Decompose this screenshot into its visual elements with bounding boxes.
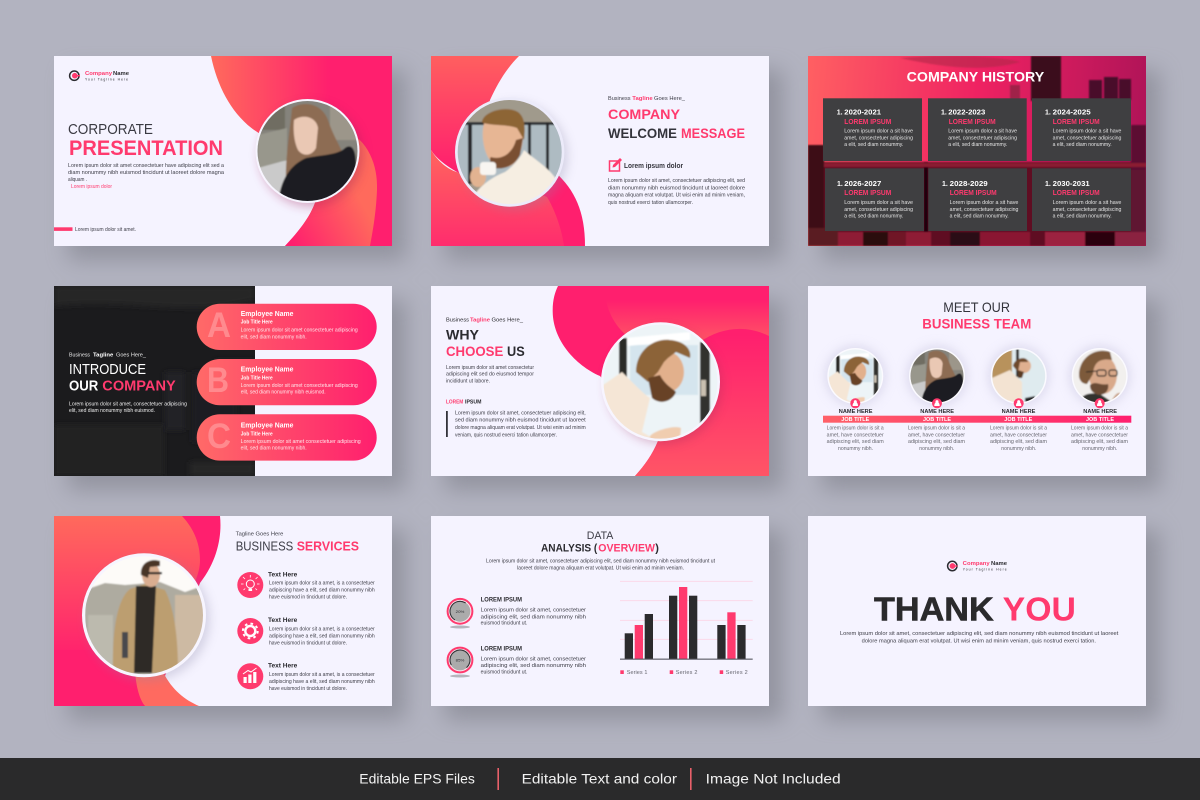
heading: MESSAGE (681, 125, 745, 141)
card: 2028-2029 (928, 168, 1027, 231)
heading: CHOOSE (446, 343, 503, 359)
gauge 85%: 85% (456, 658, 465, 662)
employee pill C: Employee Name (241, 420, 293, 429)
intro text: Lorem ipsum dolor sit amet consectetur (446, 365, 534, 371)
team member 4: NAME HERE (1083, 409, 1117, 415)
chart legend: Series 2 (676, 670, 697, 676)
dark pink wave (54, 516, 220, 706)
card: 2026-2027 (825, 168, 924, 231)
logo: Name (991, 561, 1007, 567)
heading (874, 592, 1076, 629)
card: 2022-2023: 1. (941, 110, 947, 117)
heading: ANALYSIS ( (541, 542, 598, 554)
coral wave shape (285, 130, 377, 246)
service text 2: Text Here (268, 617, 298, 624)
card: 2030-2031: a elit, sed diam nonummy. (1053, 214, 1112, 220)
subsection: veniam, quis nostrud exerci tation ullamcorper. (455, 433, 557, 439)
gauge 20% (446, 598, 474, 628)
subsection: sed diam nonummy nibh euismod tincidunt ut laoreet (455, 417, 586, 423)
employee pill C: C (207, 417, 231, 456)
service text 3: adipiscing have a elit, sed diam nonummy nibh (269, 679, 375, 685)
team member 1: Lorem ipsum dolor is sit a (827, 425, 884, 431)
slide shadows (68, 70, 1160, 720)
card: 2024-2025: amet, consectetuer adipiscing (1053, 136, 1122, 142)
icon: light bulb (237, 572, 263, 598)
employee pill A: elit, sed diam nonummy nibh. (241, 334, 307, 340)
card: 2026-2027: Lorem ipsum dolor a sit have (844, 200, 913, 206)
card: 2022-2023: Lorem ipsum dolor a sit have (948, 129, 1017, 135)
left text block: Business (69, 353, 90, 359)
left text block: INTRODUCE (69, 362, 146, 378)
heading: OVERVIEW (598, 542, 656, 554)
city photo background (808, 56, 1146, 246)
employee pill A: Employee Name (241, 309, 293, 318)
dark city photo (54, 286, 255, 476)
panel: company welcome message slide (431, 56, 769, 246)
logo: Company (963, 561, 991, 567)
chart legend: Series 2 (726, 670, 748, 676)
team member 3: NAME HERE (1002, 409, 1036, 415)
card: 2028-2029: 1. (942, 181, 948, 188)
intro text (446, 365, 534, 384)
gauge text 1 (481, 597, 586, 627)
footer text: EPS files: Editable EPS Files (359, 770, 475, 786)
card: 2024-2025: a elit, sed diam nonummy. (1053, 142, 1112, 148)
heading (541, 530, 659, 554)
left text block: Tagline (93, 353, 113, 359)
gauge 20%: 20% (456, 610, 465, 614)
gauge 85% (446, 646, 474, 678)
team member 3: nonummy nibh. (1001, 446, 1036, 452)
body text: dolore magna aliquam erat volutpat. Ut wisi enim ad minim veniam, quis nostrud exerci tation. (862, 638, 1096, 644)
employee pill A: Job Title Here (241, 320, 273, 326)
photo: man in coat (82, 553, 206, 677)
team member 3 (988, 345, 1050, 452)
logo: Company (85, 71, 113, 77)
service text 1: adipiscing have a elit, sed diam nonummy nibh (269, 587, 375, 593)
lighter inner blob (606, 300, 769, 345)
team member 3: amet, have consectetuer (990, 432, 1047, 438)
service text 1: have euismod in tincidunt ut dolore. (269, 595, 347, 601)
body text: Lorem ipsum dolor sit amet, consectetuer adipiscing elit, sed diam nonummy nibh euismod tincidunt ut laoreet (840, 631, 1119, 637)
heading: BUSINESS (236, 539, 294, 554)
card: 2030-2031 (1032, 168, 1131, 231)
card: 2020-2021: a elit, sed diam nonummy. (844, 142, 903, 148)
team member 1: nonummy nibh. (838, 446, 873, 452)
gauge text 1: euismod tincidunt ut. (481, 621, 527, 627)
panel: data analysis slide (431, 516, 769, 706)
service text 3 (268, 663, 375, 692)
subheading and body: Lorem ipsum dolor sit amet, consectetuer adipiscing elit, sed (608, 178, 745, 184)
card: 2030-2031: 2030-2031 (1053, 181, 1090, 188)
intro text: adipiscing elit sed do eiusmod tempor (446, 372, 534, 378)
tagline: Goes Here_ (492, 318, 524, 324)
panel: why choose us slide (431, 286, 769, 476)
team member 3: JOB TITLE (1004, 417, 1033, 423)
service text 3: Text Here (268, 663, 298, 670)
icon: edit note (610, 158, 622, 171)
card: 2024-2025: Lorem ipsum dolor a sit have (1053, 129, 1122, 135)
heading (446, 326, 525, 359)
title: COMPANY HISTORY (907, 69, 1045, 85)
tagline: Tagline (632, 96, 653, 102)
employee pill C: Job Title Here (241, 431, 273, 437)
heading: SERVICES (297, 539, 359, 554)
heading: CORPORATE (68, 121, 153, 138)
panel: introduce our company slide (54, 286, 392, 476)
heading: ) (655, 542, 659, 554)
service text 1 (268, 571, 375, 601)
heading (608, 106, 745, 141)
subsection: LOREM (446, 399, 464, 405)
employee pill A (197, 304, 377, 350)
photo: woman (256, 99, 360, 203)
icon: growth chart (237, 663, 263, 689)
subsection: dolore magna aliquam erat volutpat. Ut wisi enim ad minim (455, 425, 586, 431)
intro text: incididunt ut labore. (446, 378, 490, 384)
team member 2: JOB TITLE (923, 417, 952, 423)
heading: WHY (446, 326, 480, 342)
left text block: Lorem ipsum dolor sit amet, consectetuer adipiscing (69, 401, 187, 407)
footer accent and note: Lorem ipsum dolor sit amet. (75, 227, 136, 233)
card: 2028-2029: Lorem ipsum dolor a sit have (950, 200, 1019, 206)
card: 2026-2027: 1. (837, 181, 843, 188)
team member 4: Lorem ipsum dolor is sit a (1071, 425, 1128, 431)
team member 4: adipiscing elit, sed diam (1071, 439, 1128, 445)
card: 2030-2031: amet, consectetuer adipiscing (1053, 207, 1122, 213)
footer text: editable text: Editable Text and color (522, 770, 677, 786)
team member 2: adipiscing elit, sed diam (908, 439, 965, 445)
tagline: Tagline (470, 318, 490, 324)
gauge text 2: adipiscing elit, sed diam nonummy nibh (481, 663, 586, 669)
panel: thank you slide (808, 516, 1146, 706)
heading (922, 299, 1031, 331)
heading (236, 531, 359, 554)
card: 2028-2029: LOREM IPSUM (950, 190, 997, 197)
left text block (69, 353, 187, 414)
right overlay blob (635, 329, 769, 476)
employee pill B: elit, sed diam nonummy nibh euismod. (241, 390, 326, 396)
subsection: IPSUM (465, 399, 482, 405)
left text block: OUR (69, 379, 99, 395)
gauge text 1: LOREM IPSUM (481, 597, 522, 604)
pink wave shape (211, 56, 392, 246)
body text: diam nonummy nibh euismod tincidunt ut laoreet dolore magna (68, 170, 224, 176)
card: 2022-2023 (928, 98, 1027, 161)
body text (68, 163, 224, 190)
heading: WELCOME (608, 125, 677, 141)
card: 2020-2021: Lorem ipsum dolor a sit have (844, 129, 913, 135)
card: 2028-2029: amet, consectetuer adipiscing (950, 207, 1019, 213)
body text: aliquam . (68, 177, 87, 183)
panel: business services slide (54, 516, 392, 706)
team member 1 (824, 345, 886, 452)
employee pill B: Job Title Here (241, 375, 273, 381)
service text 2 (268, 617, 375, 646)
subsection: Lorem ipsum dolor sit amet, consectetuer adipiscing elit, (455, 410, 586, 416)
card: 2030-2031: Lorem ipsum dolor a sit have (1053, 200, 1122, 206)
gauge text 2 (481, 645, 586, 676)
left text block: elit, sed diam nonummy nibh euismod. (69, 408, 155, 414)
card: 2024-2025: 1. (1045, 110, 1051, 117)
tagline (446, 318, 524, 324)
gradient title bar (823, 416, 1131, 423)
pink blob (553, 286, 769, 476)
card: 2020-2021: amet, consectetuer adipiscing (844, 136, 913, 142)
gauge text 2: Lorem ipsum dolor sit amet, consectetuer (481, 656, 586, 662)
photo: man with coffee (455, 97, 565, 210)
panel: corporate presentation slide (54, 56, 392, 246)
top left wave (431, 56, 519, 180)
employee pill B: B (207, 361, 229, 400)
service text 1: Text Here (268, 571, 298, 578)
card: 2026-2027: a elit, sed diam nonummy. (844, 214, 903, 220)
coral gradient wave (54, 516, 200, 706)
card: 2024-2025: LOREM IPSUM (1053, 119, 1100, 126)
team member 1: JOB TITLE (841, 417, 870, 423)
tagline: Business (446, 318, 469, 324)
logo: Your Tagline Here (963, 568, 1007, 572)
service text 3: Lorem ipsum dolor sit a amet, is a consectetuer (269, 672, 375, 678)
logo: Your Tagline Here (85, 77, 128, 81)
tagline: Goes Here_ (654, 96, 686, 102)
team member 2: nonummy nibh. (919, 446, 954, 452)
team member 4: JOB TITLE (1086, 417, 1115, 423)
heading: BUSINESS TEAM (922, 315, 1031, 331)
employee pill C: Lorem ipsum dolor sit amet consectetuer adipiscing (241, 439, 361, 445)
chart legend (620, 670, 748, 676)
intro text: Lorem ipsum dolor sit amet, consectetuer adipiscing elit, sed diam nonummy nibh euismod tincidunt ut (486, 559, 716, 565)
subheading and body (608, 163, 745, 206)
subheading and body: diam nonummy nibh euismod tincidunt ut laoreet dolore (608, 185, 745, 191)
subsection (446, 399, 586, 439)
employee pill B (197, 359, 377, 405)
body text: Lorem ipsum dolor sit amet consectetuer have adipiscing elit sed a (68, 163, 224, 169)
service text 2: Lorem ipsum dolor sit a amet, is a consectetuer (269, 626, 375, 632)
logo (948, 561, 1007, 572)
employee pill C: elit, sed diam nonummy nibh. (241, 446, 307, 452)
gauge text 2: LOREM IPSUM (481, 645, 522, 652)
chart legend: Series 1 (627, 670, 647, 676)
employee pill C (197, 414, 377, 461)
heading: US (507, 343, 525, 359)
team member 2: amet, have consectetuer (908, 432, 965, 438)
team member 2: NAME HERE (920, 409, 954, 415)
employee pill A: Lorem ipsum dolor sit amet consectetuer adipiscing (241, 328, 358, 334)
team member 4: nonummy nibh. (1082, 446, 1117, 452)
footer bar (0, 758, 1200, 800)
logo: Name (113, 71, 129, 77)
bar chart (620, 581, 753, 676)
subheading and body: quis nostrud exerci tation ullamcorper. (608, 200, 693, 206)
heading: MEET OUR (943, 299, 1010, 315)
card: 2030-2031: LOREM IPSUM (1053, 190, 1100, 197)
team member 3: Lorem ipsum dolor is sit a (990, 425, 1047, 431)
team member 4: amet, have consectetuer (1071, 432, 1128, 438)
panel: meet our business team slide (808, 286, 1146, 476)
heading: PRESENTATION (69, 137, 223, 160)
body text (840, 631, 1119, 644)
left text block: COMPANY (102, 379, 176, 395)
panel: company history slide (808, 56, 1146, 246)
card: 2030-2031: 1. (1045, 181, 1051, 188)
logo (70, 71, 129, 81)
card: 2026-2027: amet, consectetuer adipiscing (844, 207, 913, 213)
card: 2022-2023: 2022-2023 (948, 110, 985, 117)
body text: Lorem ipsum dolor (71, 184, 112, 190)
left text block: Goes Here_ (116, 353, 147, 359)
service text 2: have euismod in tincidunt ut dolore. (269, 640, 347, 646)
intro text: laoreet dolore magna aliquam erat volutpat. Ut wisi enim ad minim veniam. (517, 565, 684, 571)
intro text (486, 559, 716, 571)
card: 2026-2027: 2026-2027 (844, 181, 881, 188)
heading: Tagline Goes Here (236, 531, 283, 537)
subheading and body: magna aliquam erat volutpat. Ut wisi enim ad minim veniam, (608, 193, 745, 199)
heading: DATA (587, 530, 614, 542)
tagline: Business (608, 96, 631, 102)
employee pill B: Employee Name (241, 365, 293, 374)
photo: man in profile (600, 322, 722, 442)
team member 1: adipiscing elit, sed diam (827, 439, 884, 445)
card: 2022-2023: LOREM IPSUM (949, 119, 996, 126)
heading: COMPANY (608, 106, 681, 122)
team member 2: Lorem ipsum dolor is sit a (908, 425, 965, 431)
bottom wave (431, 150, 564, 246)
card: 2020-2021: 2020-2021 (844, 110, 881, 117)
card: 2020-2021: 1. (837, 110, 843, 117)
card: 2026-2027: LOREM IPSUM (844, 190, 891, 197)
dark pink wave (530, 172, 585, 246)
heading: YOU (1003, 592, 1076, 629)
card: 2020-2021: LOREM IPSUM (844, 119, 891, 126)
card: 2020-2021 (823, 98, 922, 161)
tagline (608, 96, 686, 102)
team member 4 (1069, 345, 1131, 452)
heading: THANK (874, 592, 994, 629)
service text 3: have euismod in tincidunt ut dolore. (269, 686, 347, 692)
service text 2: adipiscing have a elit, sed diam nonummy nibh (269, 633, 375, 639)
employee pill B: Lorem ipsum dolor sit amet consectetuer adipiscing (241, 383, 358, 389)
gauge text 1: Lorem ipsum dolor sit amet, consectetuer (481, 608, 586, 614)
service text 1: Lorem ipsum dolor sit a amet, is a consectetuer (269, 580, 375, 586)
card: 2022-2023: a elit, sed diam nonummy. (948, 142, 1007, 148)
team member 2 (906, 345, 968, 452)
employee pill A: A (207, 306, 231, 345)
heading (68, 121, 223, 160)
card: 2024-2025 (1032, 98, 1131, 161)
team member 1: NAME HERE (839, 409, 873, 415)
footer text: image note: Image Not Included (706, 770, 841, 786)
card: 2028-2029: a elit, sed diam nonummy. (950, 214, 1009, 220)
bottom coral wave (135, 670, 199, 706)
card: 2022-2023: amet, consectetuer adipiscing (948, 136, 1017, 142)
card: 2024-2025: 2024-2025 (1053, 110, 1091, 117)
icon: gear (237, 618, 263, 644)
team member 3: adipiscing elit, sed diam (990, 439, 1047, 445)
team member 1: amet, have consectetuer (827, 432, 884, 438)
subheading and body: Lorem ipsum dolor (624, 163, 683, 170)
gauge text 2: euismod tincidunt ut. (481, 670, 527, 676)
card: 2028-2029: 2028-2029 (950, 181, 988, 188)
gauge text 1: adipiscing elit, sed diam nonummy nibh (481, 614, 586, 620)
